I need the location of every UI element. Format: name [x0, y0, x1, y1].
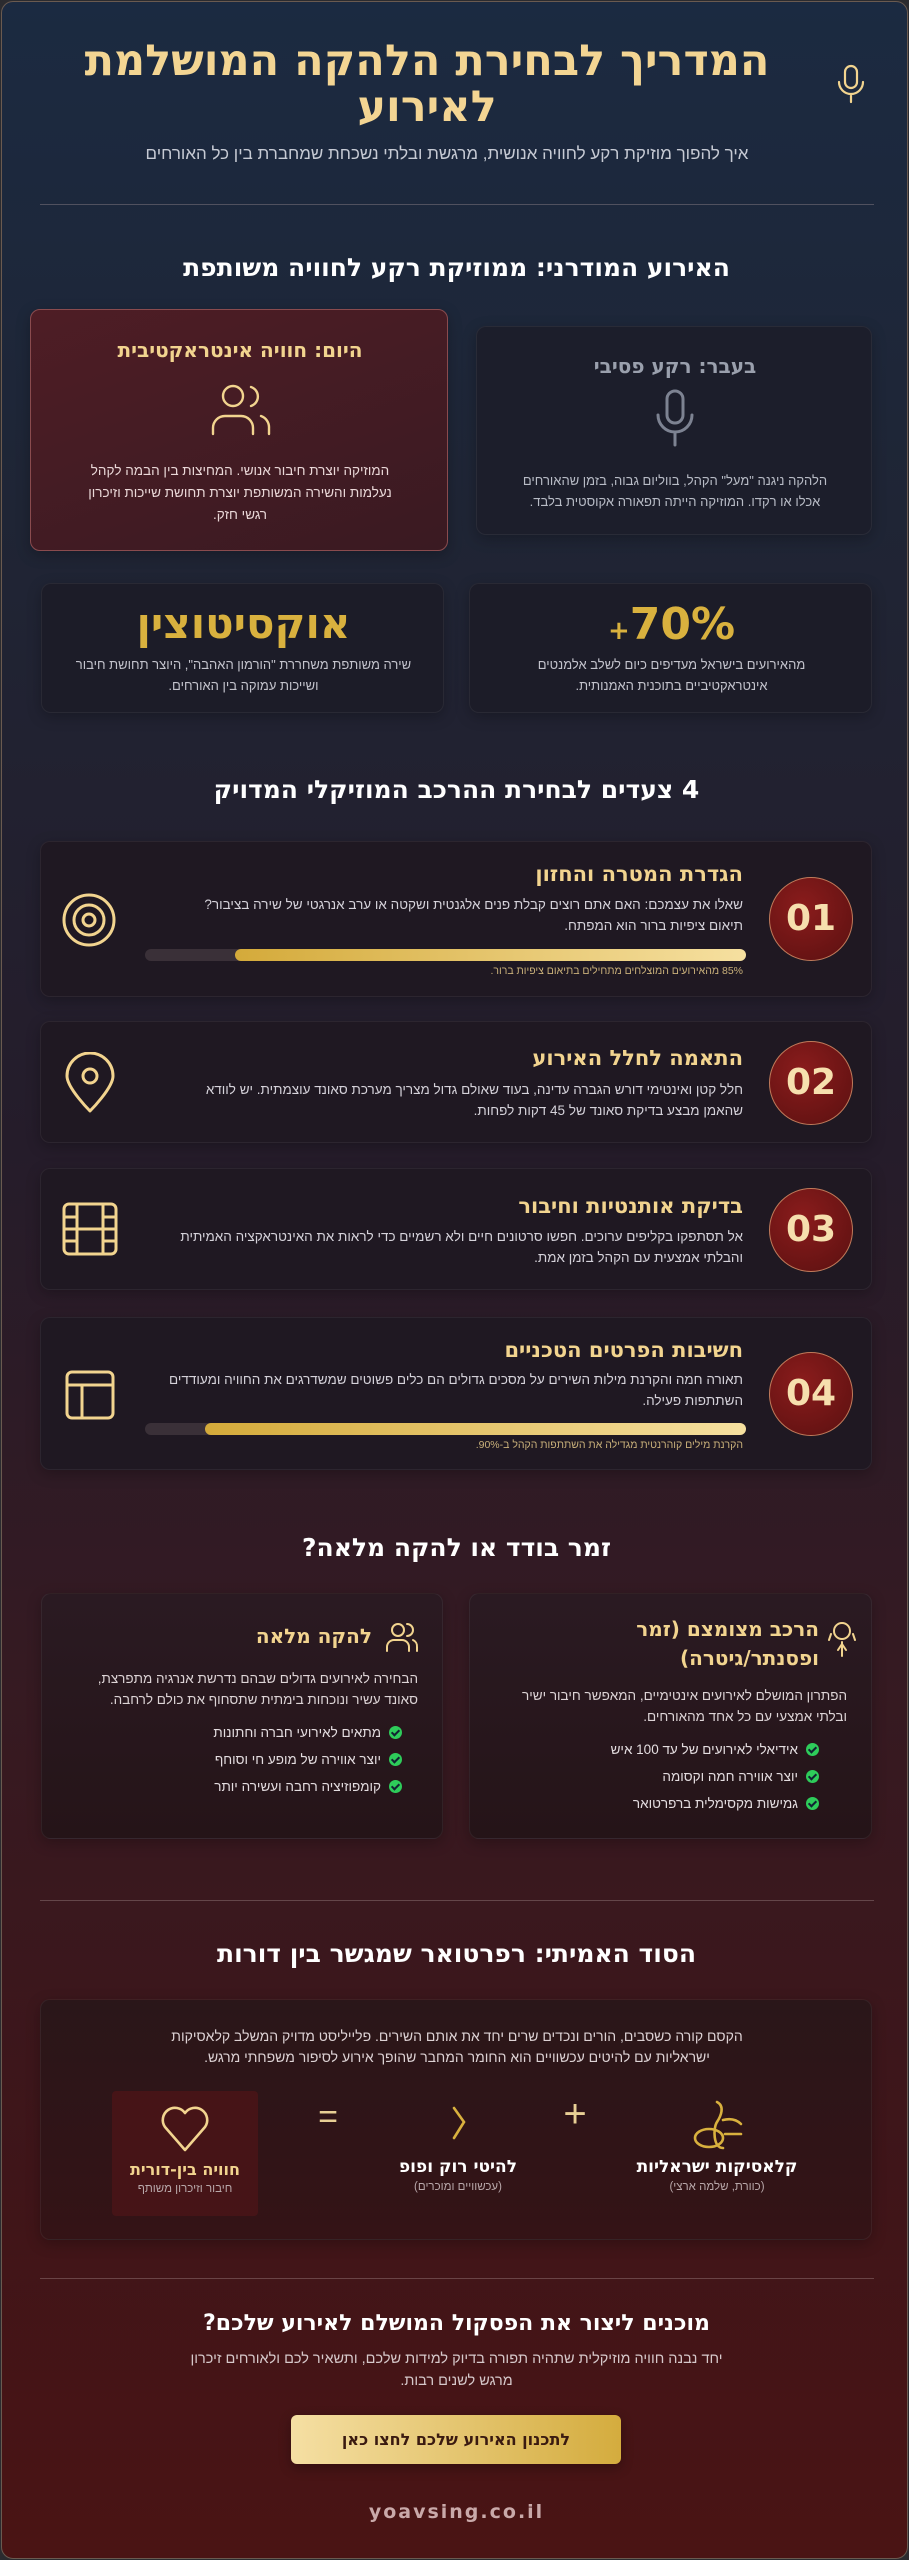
- heading: call to action: מוכנים ליצור את הפסקול המושלם לאירוע שלכם?: [203, 2311, 710, 2336]
- item: intergenerational experience: חוויה בין-דורית: [130, 2160, 240, 2179]
- button: plan your event: לתכנון האירוע שלכם לחצו כאן: [342, 2430, 570, 2449]
- subtitle: איך להפוך מוזיקת רקע לחוויה אנושית, מרגשת ובלתי נשכחת שמחברת בין כל האורחים: [146, 144, 748, 163]
- badge: 02: 02: [786, 1062, 836, 1103]
- title: המדריך לבחירת הלהקה המושלמת לאירוע: [85, 36, 769, 132]
- badge: 03: 03: [786, 1209, 836, 1250]
- stat: oxytocin: אוקסיטוצין: [136, 599, 350, 648]
- list: compact benefits: [611, 1742, 819, 1811]
- button: plan your event: [291, 2415, 621, 2464]
- icon: grey microphone: [656, 390, 694, 446]
- text: cta description: יחד נבנה חוויה מוזיקלית שתהיה תפורה בדיוק למידות שלכם, ותשאיר לכם ולאורחים זיכרון מרגש לשנים רבות.: [190, 2351, 723, 2389]
- title: compact ensemble: הרכב מצומצם (זמר ופסנתר/גיטרה): [636, 1617, 819, 1670]
- panel: step 1: [40, 841, 872, 997]
- panel: step 3: [40, 1168, 872, 1290]
- list: band benefits: קומפוזיציה רחבה ועשירה יותר: [214, 1779, 381, 1794]
- caption: 85% מהאירועים המוצלחים מתחילים בתיאום ציפיות ברור.: [490, 965, 743, 977]
- icon: people small: [386, 1623, 418, 1652]
- text: today description: המוזיקה יוצרת חיבור אנושי. המחיצות בין הבמה לקהל נעלמות והשירה המשותפת יוצרת תחושת שייכות וזיכרון רגשי חזק.: [88, 463, 392, 522]
- text: repertoire intro: הקסם קורה כשסבים, הורים ונכדים שרים יחד את אותם השירים. פלייליסט מדויק המשלב קלאסיקות ישראליות עם להיטים עכשוויים הוא החומר המחבר שהופך אירוע לסיפור משפחתי מרגש.: [171, 2028, 743, 2065]
- panel: past passive: [476, 326, 872, 535]
- title: full band: להקה מלאה: [256, 1624, 372, 1648]
- step 4 title: חשיבות הפרטים הטכניים: [504, 1338, 743, 1362]
- step 3 title: בדיקת אותנטיות וחיבור: [518, 1194, 743, 1218]
- heading: today: היום: חוויה אינטראקטיבית: [117, 338, 363, 362]
- item: intergenerational experience: [112, 2091, 258, 2216]
- item: rock and pop: (עכשוויים ומוכרים): [414, 2181, 502, 2193]
- list: compact benefits: יוצר אווירה חמה וקסומה: [662, 1769, 798, 1784]
- heading: 4 steps: 4 צעדים לבחירת ההרכב המוזיקלי המדויק: [214, 775, 699, 804]
- heading: solo or band: זמר בודד או להקה מלאה?: [302, 1533, 611, 1562]
- icon: layout: [66, 1370, 114, 1420]
- list: band benefits: [213, 1725, 402, 1794]
- list: band benefits: מתאים לאירועי חברה וחתונות: [213, 1725, 381, 1740]
- badge: 03: [769, 1188, 853, 1272]
- item: intergenerational experience: חיבור וזיכרון משותף: [138, 2183, 232, 2195]
- badge: 02: [769, 1041, 853, 1125]
- icon: film: [62, 1202, 118, 1256]
- caption: הקרנת מילים קוהרנטית מגדילה את השתתפות הקהל ב-90%.: [476, 1439, 743, 1451]
- badge: 01: [769, 877, 853, 961]
- step 2 title: התאמה לחלל האירוע: [532, 1046, 743, 1070]
- stat: oxytocin: [41, 583, 444, 713]
- list: band benefits: יוצר אווירה של מופע חי וסוחף: [215, 1752, 381, 1767]
- item: israeli classics: [636, 2100, 797, 2193]
- stat: 70 percent: מהאירועים בישראל מעדיפים כיום לשלב אלמנטים אינטראקטיביים בתוכנית האמנותית.: [538, 657, 805, 693]
- icon: header microphone: [838, 64, 864, 104]
- panel: step 4: [40, 1317, 872, 1470]
- icon: target: [62, 894, 116, 946]
- text: band description: הבחירה לאירועים גדולים שבהם נדרשת אנרגיה מתפרצת, סאונד עשיר ונוכחות בימתית שתסחוף את כולם לרחבה.: [98, 1671, 418, 1707]
- footer: website: yoavsing.co.il: [369, 2501, 544, 2523]
- icon: people: [212, 384, 270, 436]
- heading: past: בעבר: רקע פסיבי: [594, 354, 756, 378]
- step 1 title: הגדרת המטרה והחזון: [535, 862, 743, 886]
- panel: today interactive: [30, 309, 448, 551]
- stat: 70 percent: +70%: [608, 599, 735, 650]
- step 4 text: תאורה חמה והקרנת מילות השירים על מסכים גדולים הם כלים פשוטים שמשדרגים את החוויה ומעודדים השתתפות פעילה.: [169, 1372, 743, 1408]
- icon: location pin: [66, 1052, 114, 1113]
- heading: modern event: האירוע המודרני: ממוזיקת רקע לחוויה משותפת: [183, 253, 730, 282]
- text: past description: הלהקה ניגנה "מעל" הקהל, בווליום גבוה, בזמן שהאורחים אכלו או רקדו. המוזיקה הייתה תפאורה אקוסטית בלבד.: [523, 473, 827, 509]
- badge: 04: [769, 1352, 853, 1436]
- item: rock and pop: להיטי רוק ופופ: [399, 2157, 517, 2177]
- progress bar 90%: [145, 1423, 746, 1435]
- panel: full band: [41, 1593, 443, 1839]
- icon: singer: [828, 1622, 856, 1657]
- panel: repertoire formula: [40, 1999, 872, 2240]
- badge: 01: 01: [786, 898, 836, 939]
- progress bar 85%: [145, 949, 746, 961]
- icon: plus: +: [563, 2092, 587, 2136]
- panel: compact ensemble: [469, 1593, 872, 1839]
- panel: step 2: [40, 1021, 872, 1143]
- step 2 text: חלל קטן ואינטימי דורש הגברה עדינה, בעוד שאולם גדול מצריך מערכת סאונד עוצמתית. יש לוודא שהאמן מבצע בדיקת סאונד של 45 דקות לפחות.: [206, 1082, 743, 1118]
- step 3 text: אל תסתפקו בקליפים ערוכים. חפשו סרטונים חיים ולא רשמיים כדי לראות את האינטראקציה האמיתית והבלתי אמצעית עם הקהל בזמן אמת.: [180, 1229, 743, 1265]
- item: rock and pop: [399, 2106, 517, 2193]
- step 1 text: שאלו את עצמכם: האם אתם רוצים קבלת פנים אלגנטית ושקטה או ערב אנרגטי של שירה בציבור? תיאום ציפיות ברור הוא המפתח.: [204, 897, 743, 933]
- badge: 04: 04: [786, 1373, 836, 1414]
- list: compact benefits: אידיאלי לאירועים של עד 100 איש: [611, 1742, 798, 1757]
- icon: equals: =: [318, 2098, 338, 2136]
- list: compact benefits: גמישות מקסימלית ברפרטואר: [633, 1796, 798, 1811]
- item: israeli classics: קלאסיקות ישראליות: [637, 2157, 797, 2177]
- text: compact description: הפתרון המושלם לאירועים אינטימיים, המאפשר חיבור ישיר ובלתי אמצעי עם כל אחד מהאורחים.: [522, 1688, 847, 1724]
- heading: the real secret: הסוד האמיתי: רפרטואר שמגשר בין דורות: [217, 1939, 696, 1968]
- item: israeli classics: (כוורת, שלמה ארצי): [669, 2181, 765, 2193]
- stat: 70 percent: [469, 583, 872, 713]
- stat: oxytocin: שירה משותפת משחררת "הורמון האהבה", היוצר תחושת חיבור ושייכות עמוקה בין האורחים.: [76, 657, 411, 693]
